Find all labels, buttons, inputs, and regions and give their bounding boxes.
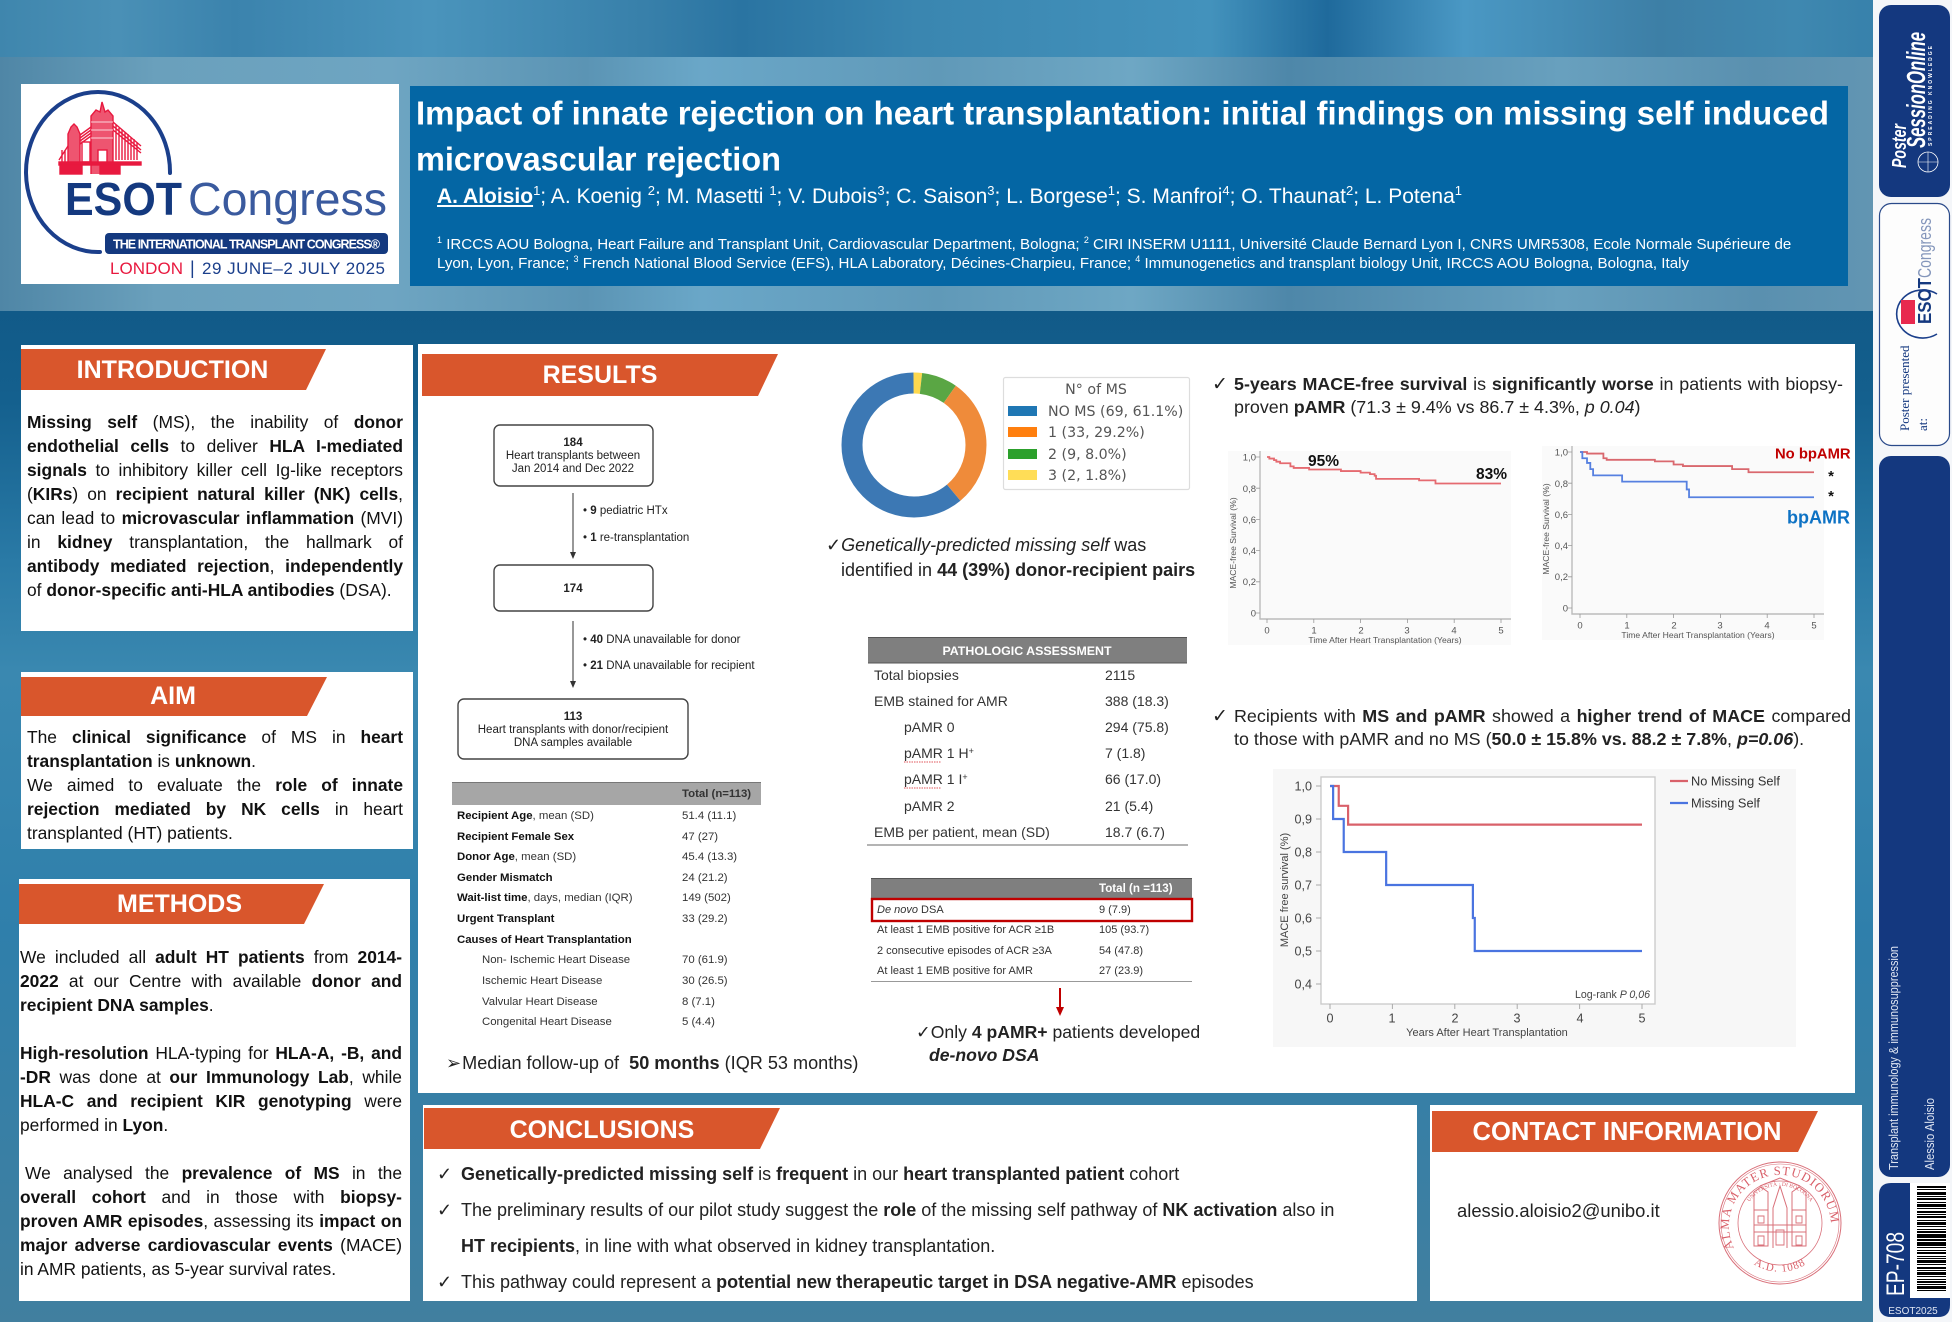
panel: introduction xyxy=(21,345,413,631)
table: outcomes with highlighted de novo DSA xyxy=(870,878,1194,982)
text: aim xyxy=(27,727,403,843)
table: patient characteristics: Recipient Age, mean (SD) xyxy=(457,810,594,822)
legend: N° of MS: 1 (33, 29.2%) xyxy=(1048,425,1145,441)
legend: N° of MS: 2 (9, 8.0%) xyxy=(1048,447,1127,463)
text: conclusions list: The preliminary results of our pilot study suggest the role of the missing self pathway of NK activation also in xyxy=(461,1200,1334,1220)
title: microvascular rejection xyxy=(416,140,781,178)
table: patient characteristics: 33 (29.2) xyxy=(682,913,728,925)
chart: survival by bpAMR: 1 xyxy=(1624,620,1630,632)
heading: contact information: CONTACT INFORMATION xyxy=(1472,1118,1781,1146)
table: patient characteristics: Congenital Heart Disease xyxy=(482,1016,612,1028)
table: pathologic assessment: 66 (17.0) xyxy=(1105,771,1161,787)
table: patient characteristics xyxy=(452,782,761,1028)
chart: survival by bpAMR: 0 xyxy=(1563,604,1568,614)
affiliations: Lyon, Lyon, France; 3 French National Blood Service (EFS), HLA Laboratory, Décines-Charpieu, France; 4 Immunogenetics and transplant biology Unit, IRCCS AOU Bologna, Bologna, Italy xyxy=(437,254,1689,272)
chart: survival by bpAMR: * xyxy=(1828,488,1834,505)
table: pathologic assessment: 7 (1.8) xyxy=(1105,745,1145,761)
logo: ESOT Congress: | xyxy=(190,258,195,278)
table: pathologic assessment: PATHOLOGIC ASSESSMENT xyxy=(942,644,1112,658)
heading: aim xyxy=(21,677,327,716)
chart: survival by bpAMR: MACE-free Survival (%) xyxy=(1541,483,1551,575)
chart: survival by missing self: No Missing Self xyxy=(1691,774,1780,788)
table: patient characteristics: Wait-list time, days, median (IQR) xyxy=(457,892,633,904)
flowchart: • 1 re-transplantation xyxy=(583,532,689,544)
text: aim: transplanted (HT) patients. xyxy=(27,823,233,843)
heading: conclusions xyxy=(424,1108,780,1149)
text: methods: proven AMR episodes, assessing its impact on xyxy=(20,1211,402,1231)
chart: overall MACE-free survival: Time After Heart Transplantation (Years) xyxy=(1308,635,1462,645)
chart: survival by missing self: 0,5 xyxy=(1294,944,1312,958)
table: pathologic assessment: 21 (5.4) xyxy=(1105,798,1153,814)
affiliations: 1 IRCCS AOU Bologna, Heart Failure and Transplant Unit, Cardiovascular Department, Bologna; 2 CIRI INSERM U1111, Université Claude Bernard Lyon I, CNRS UMR5308, Ecole Normale Supérieure de xyxy=(437,235,1791,253)
chart: survival by bpAMR: 0,4 xyxy=(1555,541,1568,552)
chart: survival by missing self: Log-rank P 0,06 xyxy=(1575,989,1650,1001)
chart: survival by missing self: 2 xyxy=(1451,1012,1459,1026)
panel: conclusions xyxy=(423,1105,1417,1301)
flowchart: • 9 pediatric HTx xyxy=(583,505,668,517)
chart: survival by bpAMR: 0 xyxy=(1577,620,1583,632)
sidebar: poster session online badge xyxy=(1879,5,1950,197)
text: conclusions list: ✓ xyxy=(437,1272,452,1292)
text: MS and pAMR trend: ✓ xyxy=(1212,706,1228,727)
text: methods: overall cohort and in those with biopsy- xyxy=(20,1187,402,1207)
icon: University of Bologna seal: A.D. 1088 xyxy=(1754,1259,1804,1272)
text: introduction xyxy=(27,412,403,600)
text: conclusions list xyxy=(437,1164,1334,1292)
table: patient characteristics: 47 (27) xyxy=(682,831,718,843)
sidebar: poster presented at ESOT Congress: Poster presented xyxy=(1897,345,1912,431)
chart: survival by bpAMR: bpAMR xyxy=(1787,508,1850,528)
heading: methods: METHODS xyxy=(117,890,242,918)
table: pathologic assessment: + xyxy=(969,746,974,756)
sidebar: abstract code and barcode: EP-708 xyxy=(1882,1232,1910,1296)
icon: Tower Bridge xyxy=(59,102,141,174)
table: outcomes with highlighted de novo DSA: Total (n =113) xyxy=(1099,882,1173,895)
text: methods: We included all adult HT patients from 2014- xyxy=(20,947,402,967)
chart: survival by bpAMR: 2 xyxy=(1671,620,1677,632)
table: patient characteristics: 45.4 (13.3) xyxy=(682,851,737,863)
table: patient characteristics: 30 (26.5) xyxy=(682,975,728,987)
text: methods: We analysed the prevalence of MS in the xyxy=(25,1163,402,1183)
text: methods: 2022 at our Centre with available donor and xyxy=(20,971,402,991)
table: patient characteristics: Causes of Heart Transplantation xyxy=(457,934,632,946)
text: introduction: Missing self (MS), the inability of donor xyxy=(27,412,403,432)
chart: survival by missing self xyxy=(1279,774,1780,1039)
arrow: red down arrow xyxy=(1056,988,1064,1016)
logo: ESOT Congress: ESOT xyxy=(65,173,182,225)
legend: N° of MS: 3 (2, 1.8%) xyxy=(1048,468,1127,484)
text: methods: recipient DNA samples. xyxy=(20,995,214,1015)
icon: University of Bologna seal: UNIVERSITÀ · DI BOLOGNA xyxy=(1746,1182,1812,1202)
text: email: alessio.aloisio2@unibo.it xyxy=(1457,1200,1660,1221)
chart: survival by missing self: 0,6 xyxy=(1294,912,1312,926)
chart: survival by missing self: 0,8 xyxy=(1294,846,1312,860)
table: outcomes with highlighted de novo DSA: 9 (7.9) xyxy=(1099,904,1131,916)
chart: overall MACE-free survival: 0,8 xyxy=(1243,484,1256,495)
chart: survival by bpAMR: No bpAMR xyxy=(1775,446,1851,462)
table: patient characteristics: 8 (7.1) xyxy=(682,996,715,1008)
chart: survival by missing self: 1 xyxy=(1388,1012,1396,1026)
chart: overall MACE-free survival: 1,0 xyxy=(1243,452,1256,464)
table: outcomes with highlighted de novo DSA: At least 1 EMB positive for AMR xyxy=(877,965,1033,977)
legend: N° of MS: NO MS (69, 61.1%) xyxy=(1048,404,1183,420)
text: introduction: can lead to microvascular inflammation (MVI) xyxy=(27,508,403,528)
chart: survival by missing self: 0,4 xyxy=(1294,978,1312,992)
table: pathologic assessment xyxy=(867,637,1188,846)
chart: survival by missing self: 0 xyxy=(1326,1012,1334,1026)
chart: survival by bpAMR: 5 xyxy=(1811,620,1817,632)
flowchart: • 40 DNA unavailable for donor xyxy=(583,634,741,646)
chart: survival by bpAMR: 0,6 xyxy=(1555,510,1568,521)
table: patient characteristics: Valvular Heart Disease xyxy=(482,996,598,1008)
sidebar: topic and author: Alessio Aloisio xyxy=(1922,1098,1937,1170)
affiliations xyxy=(437,235,1791,272)
barcode xyxy=(1917,1186,1946,1291)
chart: overall MACE-free survival: 0 xyxy=(1264,626,1270,636)
table: pathologic assessment: 294 (75.8) xyxy=(1105,719,1169,735)
table: pathologic assessment: pAMR 2 xyxy=(904,798,955,814)
chart: survival by missing self: 1,0 xyxy=(1294,780,1312,794)
heading: contact information xyxy=(1432,1111,1818,1152)
text: conclusions list: ✓ xyxy=(437,1200,452,1220)
panel: contact information xyxy=(1430,1105,1862,1301)
chart: survival by bpAMR: 0,8 xyxy=(1555,479,1568,490)
chart: survival by bpAMR: 1,0 xyxy=(1555,448,1568,458)
flowchart: Jan 2014 and Dec 2022 xyxy=(512,463,634,475)
sidebar: poster presented at ESOT Congress: ESOT xyxy=(1915,278,1935,324)
logo: ESOT Congress: THE INTERNATIONAL TRANSPLANT CONGRESS® xyxy=(113,238,381,252)
sidebar: poster presented at ESOT Congress xyxy=(1878,202,1950,446)
text: missing self identified xyxy=(826,535,1195,580)
chart: overall MACE-free survival: 2 xyxy=(1358,626,1364,636)
heading: introduction: INTRODUCTION xyxy=(77,356,268,384)
text: aim: The clinical significance of MS in heart xyxy=(27,727,403,747)
table: patient characteristics: 51.4 (11.1) xyxy=(682,810,736,822)
text: introduction: signals to inhibitory killer cell Ig-like receptors xyxy=(27,460,403,480)
heading: conclusions: CONCLUSIONS xyxy=(510,1116,694,1144)
chart: overall MACE-free survival: 0,2 xyxy=(1243,577,1256,588)
table: patient characteristics: Ischemic Heart Disease xyxy=(482,975,602,987)
text: median follow-up: ➢Median follow-up of 50 months (IQR 53 months) xyxy=(446,1053,858,1073)
chart: survival by missing self: 0,7 xyxy=(1294,878,1312,892)
chart: survival by bpAMR: * xyxy=(1828,468,1834,485)
text: introduction: (KIRs) on recipient natural killer (NK) cells, xyxy=(27,484,403,504)
heading: aim: AIM xyxy=(150,682,196,710)
table: pathologic assessment: pAMR 1 I xyxy=(904,771,962,787)
sidebar: abstract code and barcode xyxy=(1879,1183,1950,1317)
legend: N° of MS xyxy=(1003,377,1190,490)
text: conclusions list: HT recipients, in line with what observed in kidney transplantation. xyxy=(461,1236,995,1256)
sidebar: topic and author: Transplant immunology & immunosuppression xyxy=(1886,946,1901,1170)
text: 5-year MACE-free survival xyxy=(1212,374,1843,417)
text: MS and pAMR trend: Recipients with MS and pAMR showed a higher trend of MACE compared xyxy=(1234,706,1851,726)
heading: results xyxy=(422,354,778,396)
flowchart: DNA samples available xyxy=(514,737,632,749)
table: pathologic assessment: Total biopsies xyxy=(874,667,959,683)
chart: overall MACE-free survival: 83% xyxy=(1476,466,1507,483)
table: outcomes with highlighted de novo DSA: 105 (93.7) xyxy=(1099,924,1149,936)
flowchart: 113 xyxy=(564,711,582,723)
flowchart: Heart transplants with donor/recipient xyxy=(478,724,669,736)
logo: ESOT Congress xyxy=(21,84,399,284)
text: MS and pAMR trend xyxy=(1212,706,1851,749)
text: methods: High-resolution HLA-typing for HLA-A, -B, and xyxy=(20,1043,402,1063)
chart: survival by missing self: 5 xyxy=(1638,1012,1646,1026)
sidebar: poster presented at ESOT Congress: at: xyxy=(1915,418,1930,431)
flowchart xyxy=(457,424,755,760)
text: introduction: endothelial cells to deliver HLA I-mediated xyxy=(27,436,403,456)
sidebar: poster presented at ESOT Congress: Congress xyxy=(1915,218,1935,278)
text: missing self identified: ✓Genetically-predicted missing self was xyxy=(826,535,1146,555)
table: outcomes with highlighted de novo DSA: 27 (23.9) xyxy=(1099,965,1143,977)
chart: survival by bpAMR: 0,2 xyxy=(1555,572,1568,583)
sidebar: poster session online badge: Poster xyxy=(1889,123,1911,168)
text: missing self identified: identified in 44 (39%) donor-recipient pairs xyxy=(841,560,1195,580)
text: aim: transplantation is unknown. xyxy=(27,751,256,771)
text: methods: in AMR patients, as 5-year survival rates. xyxy=(20,1259,336,1279)
chart: overall MACE-free survival: 0,4 xyxy=(1243,546,1256,557)
logo: ESOT Congress: Congress xyxy=(188,173,387,225)
logo: ESOT Congress: LONDON xyxy=(110,259,183,278)
title xyxy=(416,94,1829,178)
text: conclusions list: ✓ xyxy=(437,1164,452,1184)
table: outcomes with highlighted de novo DSA: 2 consecutive episodes of ACR ≥3A xyxy=(877,945,1052,957)
table: patient characteristics: Recipient Female Sex xyxy=(457,831,575,843)
text: introduction: of donor-specific anti-HLA antibodies (DSA). xyxy=(27,580,392,600)
chart: overall MACE-free survival: MACE-free Survival (%) xyxy=(1228,497,1238,589)
chart: overall MACE-free survival: 3 xyxy=(1404,626,1410,636)
title panel xyxy=(410,86,1848,286)
table: patient characteristics: Donor Age, mean (SD) xyxy=(457,851,576,863)
table: pathologic assessment: pAMR 0 xyxy=(904,719,955,735)
table: patient characteristics: 149 (502) xyxy=(682,892,731,904)
flowchart: Heart transplants between xyxy=(506,450,640,462)
heading: methods xyxy=(19,884,324,924)
text: conclusions list: Genetically-predicted missing self is frequent in our heart transplanted patient cohort xyxy=(461,1164,1179,1184)
table: pathologic assessment: 2115 xyxy=(1105,667,1135,683)
chart: overall MACE-free survival xyxy=(1228,451,1511,645)
table: patient characteristics: 70 (61.9) xyxy=(682,954,728,966)
text: methods: -DR was done at our Immunology Lab, while xyxy=(20,1067,402,1087)
sidebar: poster session online badge: SPREADING KNOWLEDGE xyxy=(1928,45,1934,146)
flowchart: • 21 DNA unavailable for recipient xyxy=(583,660,755,672)
text: methods: performed in Lyon. xyxy=(20,1115,168,1135)
table: patient characteristics: Total (n=113) xyxy=(682,788,751,800)
legend: N° of MS: N° of MS xyxy=(1065,382,1127,398)
table: pathologic assessment: 18.7 (6.7) xyxy=(1105,824,1165,840)
table: pathologic assessment: pAMR 1 H xyxy=(904,745,969,761)
table: outcomes with highlighted de novo DSA: De novo DSA xyxy=(877,904,944,916)
panel: results xyxy=(418,344,1855,1093)
text: aim: We aimed to evaluate the role of innate xyxy=(27,775,403,795)
title: Impact of innate rejection on heart transplantation: initial findings on missing self induced xyxy=(416,94,1829,132)
panel: aim xyxy=(21,672,413,849)
text: pAMR de-novo DSA: ✓Only 4 pAMR+ patients developed xyxy=(916,1022,1200,1042)
table: pathologic assessment: EMB per patient, mean (SD) xyxy=(874,824,1050,840)
chart: survival by bpAMR: Time After Heart Transplantation (Years) xyxy=(1621,630,1775,640)
chart: survival by bpAMR: 4 xyxy=(1764,620,1770,632)
chart: overall MACE-free survival: 0,6 xyxy=(1243,515,1256,526)
heading: introduction xyxy=(21,349,326,390)
chart: survival by missing self: Missing Self xyxy=(1691,796,1760,810)
flowchart: 174 xyxy=(563,583,583,595)
text: conclusions list: This pathway could represent a potential new therapeutic target in DSA negative-AMR episodes xyxy=(461,1272,1254,1292)
table: outcomes with highlighted de novo DSA: 54 (47.8) xyxy=(1099,945,1143,957)
chart: survival by missing self: Years After Heart Transplantation xyxy=(1406,1027,1568,1039)
chart: survival by missing self: 4 xyxy=(1576,1012,1584,1026)
chart: survival by missing self: MACE free survival (%) xyxy=(1279,833,1291,947)
text: MS and pAMR trend: to those with pAMR and no MS (50.0 ± 15.8% vs. 88.2 ± 7.8%, p=0.06). xyxy=(1234,729,1804,749)
table: patient characteristics: 5 (4.4) xyxy=(682,1016,715,1028)
chart: survival by bpAMR xyxy=(1541,446,1851,640)
chart: overall MACE-free survival: 4 xyxy=(1451,626,1457,636)
heading: results: RESULTS xyxy=(543,361,657,389)
table: patient characteristics: Urgent Transplant xyxy=(457,913,555,925)
flowchart: 184 xyxy=(563,437,583,449)
table: outcomes with highlighted de novo DSA: At least 1 EMB positive for ACR ≥1B xyxy=(877,924,1054,936)
chart: overall MACE-free survival: 0 xyxy=(1251,608,1256,620)
text: aim: rejection mediated by NK cells in heart xyxy=(27,799,403,819)
logo: ESOT Congress: 29 JUNE–2 JULY 2025 xyxy=(202,259,385,278)
text: methods: HLA-C and recipient KIR genotyping were xyxy=(20,1091,402,1111)
panel: methods xyxy=(19,879,410,1301)
table: pathologic assessment: + xyxy=(962,772,968,782)
text: pAMR de-novo DSA xyxy=(916,1022,1200,1065)
chart: survival by missing self: 0,9 xyxy=(1294,812,1312,826)
chart: survival by bpAMR: 3 xyxy=(1717,620,1723,632)
text: 5-year MACE-free survival: ✓ xyxy=(1212,374,1228,395)
table: pathologic assessment: EMB stained for AMR xyxy=(874,693,1008,709)
chart: overall MACE-free survival: 5 xyxy=(1498,626,1504,636)
table: patient characteristics: Non- Ischemic Heart Disease xyxy=(482,954,630,966)
text: introduction: antibody mediated rejection, independently xyxy=(27,556,403,576)
table: patient characteristics: 24 (21.2) xyxy=(682,872,728,884)
sidebar: abstract code and barcode: ESOT2025 xyxy=(1888,1306,1938,1317)
text: methods xyxy=(20,947,402,1279)
chart: survival by missing self: 3 xyxy=(1513,1012,1521,1026)
icon: University of Bologna seal: ALMA MATER STUDIORUM xyxy=(1720,1166,1840,1248)
text: pAMR de-novo DSA: de-novo DSA xyxy=(929,1045,1039,1065)
chart: overall MACE-free survival: 1 xyxy=(1311,626,1317,636)
text: 5-year MACE-free survival: proven pAMR (71.3 ± 9.4% vs 86.7 ± 4.3%, p 0.04) xyxy=(1234,397,1640,417)
chart: donut of missing self count xyxy=(842,372,986,518)
authors: A. Aloisio1; A. Koenig 2; M. Masetti 1; V. Dubois3; C. Saison3; L. Borgese1; S. Manfroi4; O. Thaunat2; L. Potena1 xyxy=(437,183,1462,208)
table: patient characteristics: Gender Mismatch xyxy=(457,872,553,884)
chart: overall MACE-free survival: 95% xyxy=(1308,453,1339,470)
text: introduction: in kidney transplantation, the hallmark of xyxy=(27,532,403,552)
sidebar: topic and author xyxy=(1879,456,1950,1177)
text: 5-year MACE-free survival: 5-years MACE-free survival is significantly worse in patients with biopsy- xyxy=(1234,374,1843,394)
table: pathologic assessment: 388 (18.3) xyxy=(1105,693,1169,709)
text: methods: major adverse cardiovascular events (MACE) xyxy=(20,1235,402,1255)
